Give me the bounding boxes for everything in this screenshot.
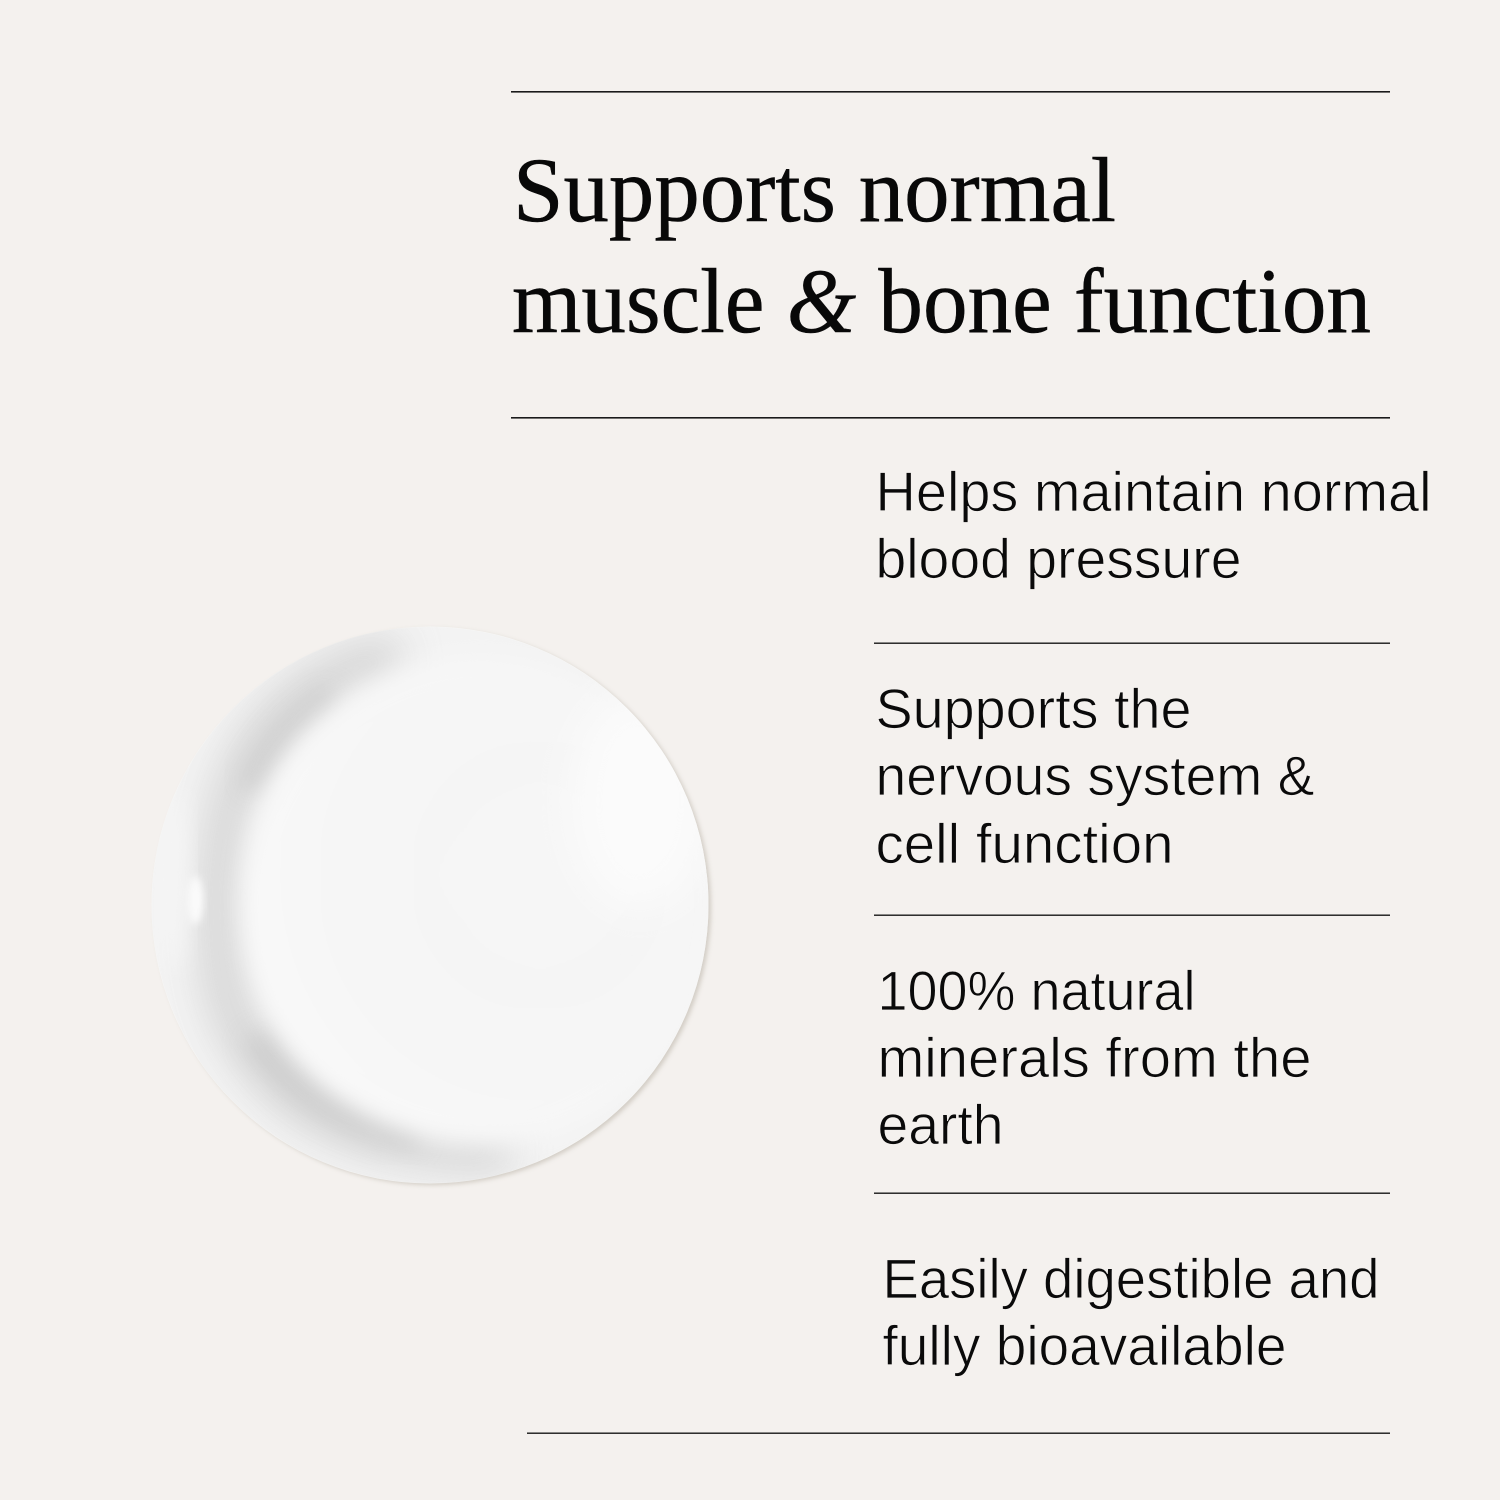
benefit: digestibility: fully bioavailable: [882, 1314, 1286, 1377]
heading: [512, 139, 1371, 352]
divider: [874, 914, 1390, 916]
heading divider: [511, 417, 1390, 419]
product swatch: white mineral powder disc: [152, 626, 722, 1185]
heading: Supports normal: [513, 139, 1116, 241]
divider: [874, 642, 1390, 644]
benefit: nervous system: nervous system &: [876, 744, 1314, 807]
divider: [874, 1192, 1390, 1194]
benefit: digestibility: Easily digestible and: [882, 1247, 1380, 1310]
benefit: nervous system: [876, 677, 1314, 875]
benefit: nervous system: Supports the: [876, 677, 1192, 740]
benefit: blood pressure: [876, 460, 1432, 590]
benefit: blood pressure: blood pressure: [876, 527, 1242, 590]
benefit: natural minerals: earth: [878, 1093, 1004, 1156]
heading: muscle & bone function: [512, 250, 1371, 352]
benefit: natural minerals: [878, 959, 1312, 1156]
top divider: [511, 91, 1390, 93]
benefit: blood pressure: Helps maintain normal: [876, 460, 1432, 523]
benefit: digestibility: [882, 1247, 1380, 1377]
benefit: nervous system: cell function: [876, 812, 1174, 875]
benefit: natural minerals: minerals from the: [878, 1026, 1312, 1089]
bottom divider: [527, 1432, 1390, 1434]
benefit: natural minerals: 100% natural: [878, 959, 1196, 1022]
